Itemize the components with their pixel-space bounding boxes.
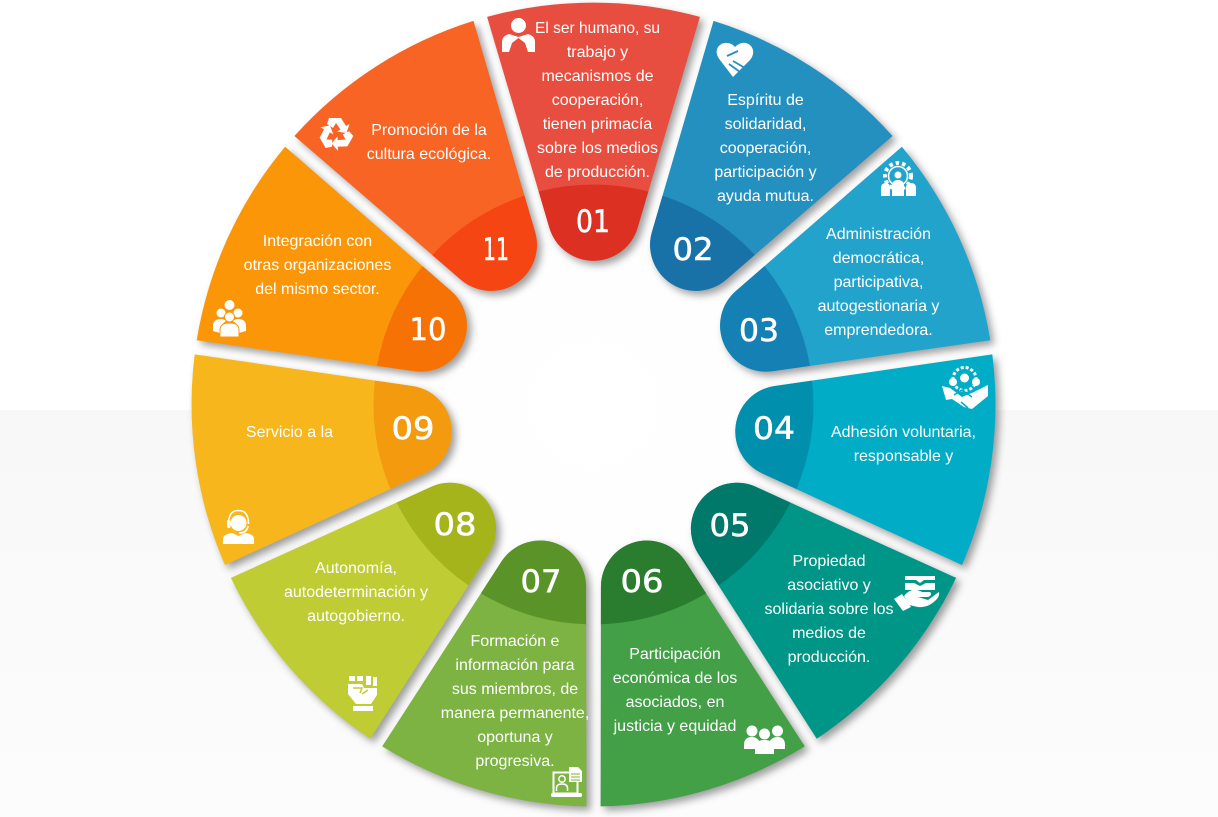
text 05 <box>765 553 893 666</box>
text 11 <box>367 122 491 163</box>
text 01: de producción. <box>545 164 650 181</box>
text 05: producción. <box>788 649 870 666</box>
text 05: asociativo y <box>787 577 871 594</box>
text 11: cultura ecológica. <box>367 146 491 163</box>
text 02: participación y <box>714 164 817 181</box>
text 07: progresiva. <box>475 753 555 770</box>
icon: raised fist <box>348 676 377 711</box>
text 06 <box>613 646 737 735</box>
text 01: mecanismos de <box>541 68 654 85</box>
panel 04: voluntary membership <box>721 320 1006 567</box>
text 03 <box>818 226 939 339</box>
icon: laptop with document <box>551 767 582 797</box>
text 01: El ser humano, su <box>535 20 660 37</box>
number 11: 11 <box>483 232 509 268</box>
text 07: información para <box>455 657 575 674</box>
number 04: 04 <box>753 411 795 447</box>
icon: box on hand <box>894 576 939 611</box>
icon: headset agent <box>223 510 254 544</box>
text 08 <box>284 560 428 625</box>
panel 06: economic participation <box>532 512 809 817</box>
text 10: Integración con <box>263 233 372 250</box>
text 01: tienen primacía <box>543 116 652 133</box>
panel 08: autonomy <box>220 418 555 748</box>
text 05: Propiedad <box>793 553 865 570</box>
text 03: emprendedora. <box>824 322 933 339</box>
number 01: 01 <box>576 204 610 240</box>
text 10: del mismo sector. <box>255 281 380 298</box>
text 07: oportuna y <box>477 729 553 746</box>
text 03: participativa, <box>834 274 923 291</box>
text 03: autogestionaria y <box>818 298 939 315</box>
number 02: 02 <box>672 232 714 268</box>
panel 02: solidarity <box>582 9 900 341</box>
text 04: responsable y <box>854 448 953 465</box>
text 01 <box>535 20 660 181</box>
number 05: 05 <box>710 508 750 544</box>
text 08: autodeterminación y <box>284 584 428 601</box>
text 10: otras organizaciones <box>244 257 391 274</box>
number 09: 09 <box>392 411 434 447</box>
text 04 <box>831 424 976 465</box>
icon: gear with people <box>881 163 916 196</box>
panel 10: integration <box>184 141 507 442</box>
text 05: solidaria sobre los <box>765 601 893 618</box>
text 05: medios de <box>792 625 866 642</box>
panel 03: democratic administration <box>680 141 1003 442</box>
text 07: manera permanente, <box>441 705 589 722</box>
number 07: 07 <box>520 564 562 600</box>
text 02 <box>714 92 817 205</box>
panel 05: associative property <box>632 418 967 748</box>
text 07: sus miembros, de <box>452 681 578 698</box>
text 07 <box>441 633 589 770</box>
text 02: ayuda mutua. <box>717 188 814 205</box>
panel 07: training and information <box>378 512 655 817</box>
number 08: 08 <box>434 507 476 543</box>
icon: group <box>213 300 246 337</box>
text 09: Servicio a la <box>246 424 333 441</box>
text 06: asociados, en <box>626 694 724 711</box>
text 02: cooperación, <box>720 140 811 157</box>
text 01: trabajo y <box>567 44 628 61</box>
panel 01: human being <box>487 3 700 261</box>
text 01: cooperación, <box>552 92 643 109</box>
text 07: Formación e <box>471 633 560 650</box>
icon: person <box>502 18 535 52</box>
text 03: Administración <box>826 226 931 243</box>
number 03: 03 <box>739 313 779 349</box>
text 06: justicia y equidad <box>613 718 736 735</box>
icon: three people <box>744 726 785 754</box>
text 11: Promoción de la <box>371 122 487 139</box>
text 01: sobre los medios <box>537 140 658 157</box>
number 10: 10 <box>410 312 446 348</box>
number 06: 06 <box>620 564 664 600</box>
text 08: Autonomía, <box>315 560 397 577</box>
icon: recycle <box>315 118 354 154</box>
text 04: Adhesión voluntaria, <box>831 424 976 441</box>
text 06: Participación <box>629 646 721 663</box>
text 03: democrática, <box>833 250 924 267</box>
text 02: Espíritu de <box>727 92 804 109</box>
icon: handshake with people <box>942 368 988 409</box>
text 08: autogobierno. <box>307 608 405 625</box>
text 10 <box>244 233 391 298</box>
icon: heart handshake <box>717 43 753 77</box>
panel 11: ecological culture <box>287 9 605 341</box>
text 02: solidaridad, <box>725 116 806 133</box>
text 06: económica de los <box>613 670 737 687</box>
panel 09: service <box>181 320 466 567</box>
